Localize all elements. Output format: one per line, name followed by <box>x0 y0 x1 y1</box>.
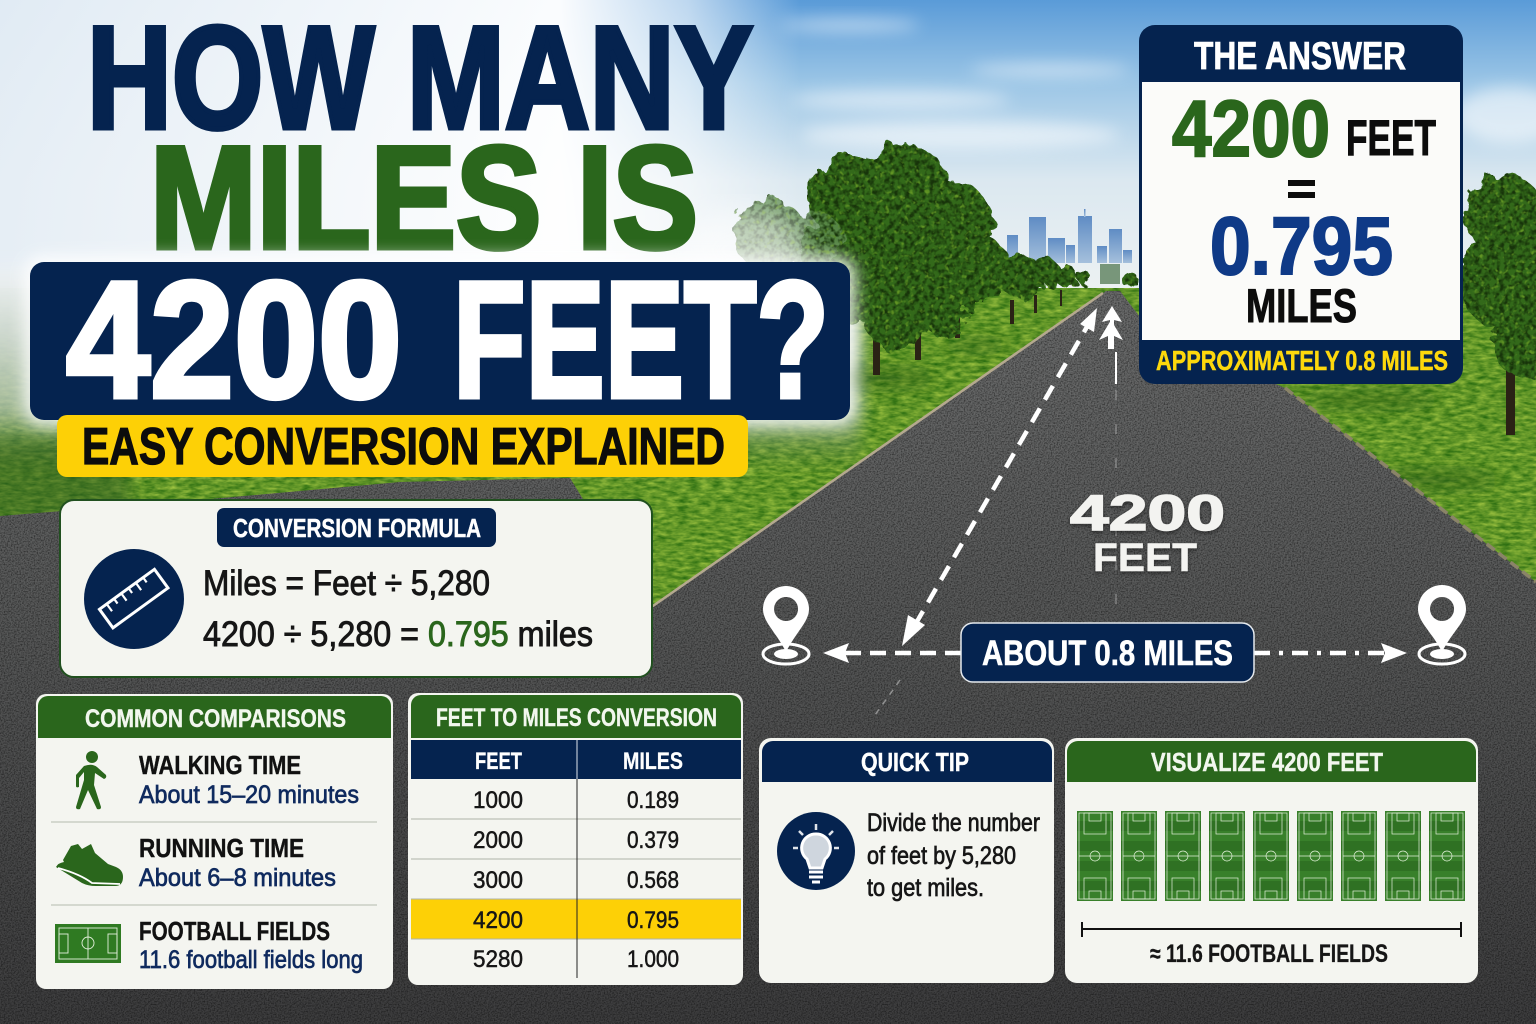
running time text: About 6–8 minutes <box>139 864 336 892</box>
walking time text: WALKING TIME <box>139 750 301 780</box>
table rows: 2000 <box>473 827 523 854</box>
quick tip header <box>762 741 1052 782</box>
table rows: 1000 <box>473 787 523 814</box>
title line 2: MILES IS <box>150 116 698 279</box>
arrow: diagonal dashed arrow along road <box>902 308 1097 646</box>
quick tip header: QUICK TIP <box>861 747 969 777</box>
table rows <box>473 787 679 973</box>
answer panel <box>1139 25 1463 384</box>
icon: end pin <box>1418 585 1466 664</box>
icon: ruler <box>84 549 184 649</box>
0.795 value: 0.795 <box>1210 201 1393 292</box>
distance pill <box>961 623 1254 682</box>
fields caption: ≈ 11.6 FOOTBALL FIELDS <box>1150 940 1388 968</box>
trees <box>685 144 1536 435</box>
table rows: 4200 <box>473 907 523 934</box>
road <box>0 291 1536 1024</box>
quick tip text: to get miles. <box>867 874 984 902</box>
road label: 4200 feet: 4200 <box>1070 485 1225 541</box>
walking time text <box>139 750 359 809</box>
grass <box>0 288 1536 608</box>
icon: running shoe <box>56 844 123 886</box>
arrow: dashed left to pin <box>823 643 961 663</box>
table rows: 0.379 <box>627 827 679 854</box>
distance pill: ABOUT 0.8 MILES <box>982 634 1233 673</box>
road label: 4200 feet: FEET <box>1093 536 1197 580</box>
table rows: 0.568 <box>627 867 679 894</box>
table rows: 1.000 <box>627 946 679 973</box>
football fields text: FOOTBALL FIELDS <box>139 916 330 946</box>
football fields text <box>139 916 363 974</box>
title line 1: HOW MANY <box>87 0 753 159</box>
formula line 2: 4200 ÷ 5,280 = 0.795 miles <box>203 615 593 654</box>
subtitle banner: EASY CONVERSION EXPLAINED <box>82 418 725 476</box>
table rows: 5280 <box>473 946 523 973</box>
table rows: 3000 <box>473 867 523 894</box>
table header row: MILES <box>623 748 683 775</box>
icon: light bulb <box>777 812 855 890</box>
icon: walking person <box>76 751 106 809</box>
panel: conversion formula <box>60 500 652 677</box>
equals sign <box>1288 180 1315 198</box>
running time text <box>139 833 336 892</box>
visualize header: VISUALIZE 4200 FEET <box>1151 747 1383 777</box>
city skyline <box>1007 209 1132 263</box>
table header row <box>411 740 741 779</box>
table title <box>411 695 741 738</box>
formula heading pill: CONVERSION FORMULA <box>233 513 481 543</box>
quick tip text: Divide the number <box>867 809 1040 837</box>
table header row: FEET <box>475 748 522 775</box>
table title: FEET TO MILES CONVERSION <box>436 704 717 732</box>
football fields text: 11.6 football fields long <box>139 946 363 974</box>
title banner: 4200 feet: FEET? <box>453 248 829 433</box>
icon: football field <box>55 924 121 963</box>
answer heading: THE ANSWER <box>1194 35 1406 78</box>
4200 feet value: FEET <box>1346 110 1436 166</box>
road label: 4200 feet <box>1070 485 1225 580</box>
distance bracket <box>1082 922 1461 937</box>
arrow: vertical road arrows <box>1099 306 1123 384</box>
panel: visualize 4200 feet <box>1065 738 1478 983</box>
miles label: MILES <box>1246 279 1357 332</box>
comparisons header: COMMON COMPARISONS <box>85 705 346 733</box>
table rows: 0.795 <box>627 907 679 934</box>
row of football fields <box>1077 811 1465 901</box>
quick tip text <box>867 809 1040 902</box>
panel: feet to miles table <box>408 693 743 985</box>
icon: start pin <box>763 586 809 664</box>
comparisons header <box>38 696 391 738</box>
visualize header <box>1067 741 1476 782</box>
arrow: dashed right to pin <box>1254 643 1407 663</box>
table rows: 0.189 <box>627 787 679 814</box>
running time text: RUNNING TIME <box>139 833 304 863</box>
panel: quick tip <box>759 738 1054 983</box>
panel: common comparisons <box>36 694 393 989</box>
4200 feet value <box>1172 84 1436 173</box>
formula line 1: Miles = Feet ÷ 5,280 <box>203 564 490 603</box>
approximate value: APPROXIMATELY 0.8 MILES <box>1156 345 1448 376</box>
title banner: 4200 feet: 4200 <box>66 248 402 433</box>
title banner: 4200 feet <box>24 248 856 433</box>
walking time text: About 15–20 minutes <box>139 781 359 809</box>
highlighted row <box>411 899 741 939</box>
formula heading pill <box>217 508 496 547</box>
quick tip text: of feet by 5,280 <box>867 842 1016 870</box>
4200 feet value: 4200 <box>1172 84 1330 173</box>
